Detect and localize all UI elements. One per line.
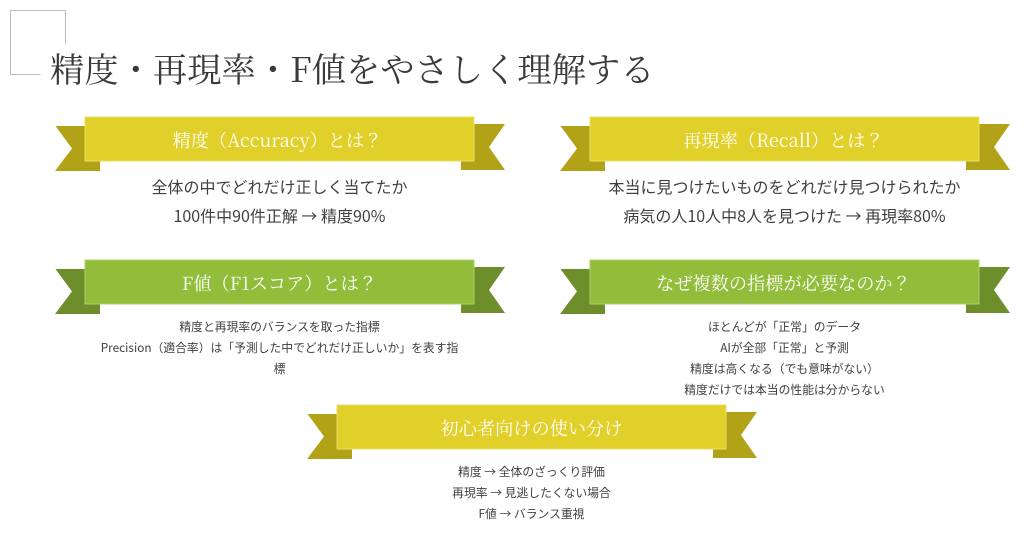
description: why multiple metrics: ほとんどが「正常」のデータ xyxy=(708,318,861,335)
description: recall: 本当に見つけたいものをどれだけ見つけられたか xyxy=(608,174,960,198)
ribbon: accuracy xyxy=(55,116,505,171)
panel: f1 score xyxy=(55,260,505,377)
ribbon: usage for beginners xyxy=(307,404,757,459)
description: why multiple metrics xyxy=(684,318,885,398)
description: accuracy xyxy=(151,174,408,227)
heading: accuracy: 精度（Accuracy）とは？ xyxy=(173,127,382,153)
description: why multiple metrics: 精度だけでは本当の性能は分からない xyxy=(684,381,885,398)
description: usage for beginners: F値 → バランス重視 xyxy=(479,505,584,522)
panel: why multiple metrics xyxy=(560,260,1010,398)
description: accuracy: 100件中90件正解 → 精度90% xyxy=(173,203,386,227)
description: f1 score: Precision（適合率）は「予測した中でどれだけ正しいか」を表す指 xyxy=(101,339,458,356)
description: accuracy: 全体の中でどれだけ正しく当てたか xyxy=(151,174,408,198)
description: why multiple metrics: 精度は高くなる（でも意味がない） xyxy=(690,360,879,377)
ribbon: why multiple metrics xyxy=(560,260,1010,314)
panel: accuracy xyxy=(55,116,505,227)
description: usage for beginners: 再現率 → 見逃したくない場合 xyxy=(452,484,611,501)
heading: f1 score: F値（F1スコア）とは？ xyxy=(182,270,377,296)
description: f1 score: 標 xyxy=(274,360,285,377)
heading: recall: 再現率（Recall）とは？ xyxy=(683,127,884,153)
description: usage for beginners xyxy=(452,463,611,522)
description: f1 score: 精度と再現率のバランスを取った指標 xyxy=(179,318,380,335)
heading: why multiple metrics: なぜ複数の指標が必要なのか？ xyxy=(656,270,911,296)
description: recall: 病気の人10人中8人を見つけた → 再現率80% xyxy=(623,203,946,227)
heading: usage for beginners: 初心者向けの使い分け xyxy=(441,415,622,441)
description: why multiple metrics: AIが全部「正常」と予測 xyxy=(720,339,849,356)
panel: usage for beginners xyxy=(307,404,757,522)
ribbon: f1 score xyxy=(55,260,505,314)
ribbon: recall xyxy=(560,116,1010,171)
description: usage for beginners: 精度 → 全体のざっくり評価 xyxy=(458,463,605,480)
description: f1 score xyxy=(101,318,458,377)
decorative corner frame xyxy=(10,10,66,75)
description: recall xyxy=(608,174,960,227)
panel: recall xyxy=(560,116,1010,227)
title: 精度・再現率・F値をやさしく理解する xyxy=(50,43,655,92)
